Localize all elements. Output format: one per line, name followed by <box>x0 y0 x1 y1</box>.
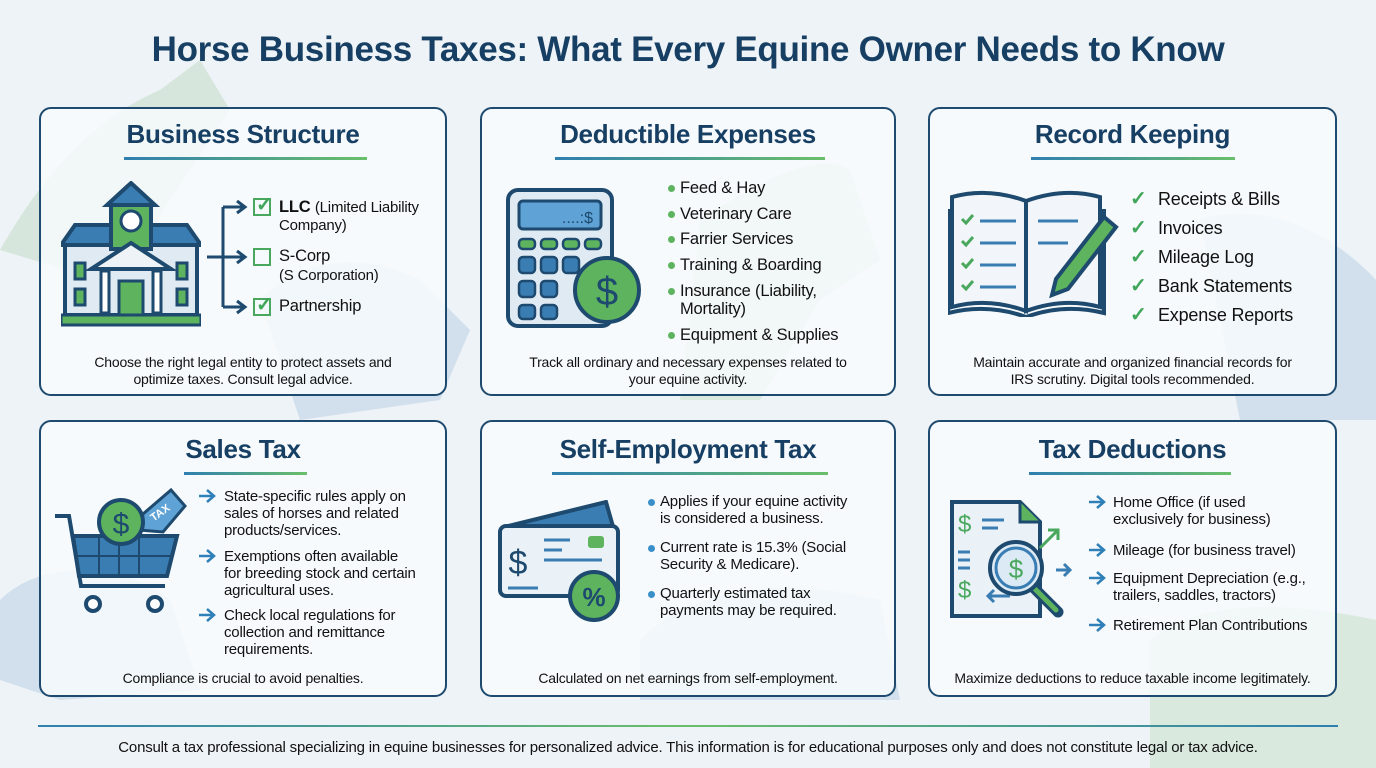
list: records <box>1130 188 1293 326</box>
list: sales tax rules: sales of horses and related <box>224 505 399 522</box>
footer disclaimer: Consult a tax professional specializing in equine businesses for personalized advice. This information is for educational purposes only and does not constitute legal or tax advice. <box>118 739 1258 756</box>
panel: self-employment tax <box>480 420 896 697</box>
caption <box>973 354 1292 387</box>
heading: Deductible Expenses <box>560 119 816 149</box>
caption <box>94 354 392 387</box>
icon: document with magnifier: $ <box>958 577 971 604</box>
list: self-employment facts: Current rate is 15.3% (Social <box>660 539 846 556</box>
heading: Record Keeping <box>1035 119 1230 149</box>
caption <box>529 354 847 387</box>
icon: document with magnifier: $ <box>958 511 971 538</box>
heading: Business Structure <box>126 119 360 149</box>
list: expenses: Equipment & Supplies <box>680 326 838 344</box>
icon: shopping cart with tax tag: TAX <box>148 502 173 524</box>
list: entities: (S Corporation) <box>279 267 379 284</box>
list: records: ✓ <box>1130 188 1147 210</box>
panel: record keeping <box>928 107 1337 396</box>
list: expenses: Mortality) <box>680 300 746 318</box>
list: entities: ✓ <box>256 194 273 216</box>
list: entities <box>253 194 419 316</box>
icon: document with magnifier <box>950 500 1072 618</box>
list: records: ✓ <box>1130 275 1147 297</box>
heading: Self-Employment Tax <box>560 434 816 464</box>
icon: check with percent: % <box>582 582 606 612</box>
list: sales tax rules <box>199 488 416 658</box>
icon: building <box>61 181 201 326</box>
caption: Calculated on net earnings from self-employment. <box>538 670 838 686</box>
list: expenses <box>668 179 838 344</box>
list: sales tax rules: collection and remittance <box>224 624 385 641</box>
panel: business structure <box>39 107 447 396</box>
list: deductions <box>1089 494 1307 634</box>
caption: your equine activity. <box>629 371 747 387</box>
icon: calculator <box>506 188 641 328</box>
list: sales tax rules: products/services. <box>224 522 341 539</box>
list: sales tax rules: agricultural uses. <box>224 582 334 599</box>
heading: Sales Tax <box>185 434 301 464</box>
caption: Maintain accurate and organized financial records for <box>973 354 1292 370</box>
list: sales tax rules: Check local regulations for <box>224 607 395 624</box>
caption: Compliance is crucial to avoid penalties. <box>123 670 363 686</box>
list: deductions: Equipment Depreciation (e.g., <box>1113 570 1306 587</box>
list: self-employment facts: Applies if your equine activity <box>660 493 847 510</box>
list: entities: LLC (Limited Liability <box>279 198 419 216</box>
icon: calculator: ....:$ <box>562 210 593 227</box>
list: sales tax rules: State-specific rules apply on <box>224 488 406 505</box>
icon: document with magnifier: $ <box>1009 554 1024 584</box>
title: Horse Business Taxes: What Every Equine Owner Needs to Know <box>152 30 1224 69</box>
list: sales tax rules: Exemptions often available <box>224 548 398 565</box>
list: expenses: Farrier Services <box>680 230 793 248</box>
panel: sales tax <box>39 420 447 697</box>
caption: Track all ordinary and necessary expenses related to <box>529 354 847 370</box>
list: self-employment facts: Quarterly estimated tax <box>660 585 810 602</box>
icon: shopping cart with tax tag <box>55 488 187 613</box>
heading: Tax Deductions <box>1039 434 1226 464</box>
list: sales tax rules: requirements. <box>224 641 313 658</box>
list: entities: S-Corp <box>279 247 330 265</box>
list: entities: ✓ <box>256 294 273 316</box>
list: entities: Company) <box>279 217 347 234</box>
list: self-employment facts <box>648 493 848 619</box>
list: deductions: Home Office (if used <box>1113 494 1245 511</box>
panel: tax deductions <box>928 420 1337 697</box>
list: expenses: Feed & Hay <box>680 179 765 197</box>
arrows: bracket <box>207 200 248 314</box>
list: deductions: Mileage (for business travel) <box>1113 542 1296 559</box>
icon: shopping cart with tax tag: $ <box>113 508 130 541</box>
caption: IRS scrutiny. Digital tools recommended. <box>1011 371 1254 387</box>
caption: optimize taxes. Consult legal advice. <box>133 371 353 387</box>
list: records: Invoices <box>1158 218 1222 238</box>
list: entities: Partnership <box>279 297 361 315</box>
list: records: ✓ <box>1130 304 1147 326</box>
icon: calculator: $ <box>596 270 618 314</box>
list: records: Expense Reports <box>1158 305 1293 325</box>
list: records: ✓ <box>1130 217 1147 239</box>
list: sales tax rules: for breeding stock and certain <box>224 565 416 582</box>
list: self-employment facts: payments may be required. <box>660 602 837 619</box>
list: deductions: Retirement Plan Contributions <box>1113 617 1307 634</box>
list: records: ✓ <box>1130 246 1147 268</box>
list: deductions: trailers, saddles, tractors) <box>1113 587 1276 604</box>
list: records: Mileage Log <box>1158 247 1254 267</box>
icon: check with percent <box>498 500 620 622</box>
list: records: Receipts & Bills <box>1158 189 1280 209</box>
list: expenses: Insurance (Liability, <box>680 282 817 300</box>
list: records: Bank Statements <box>1158 276 1292 296</box>
icon: check with percent: $ <box>509 544 528 582</box>
icon: ledger book with pencil <box>948 190 1119 317</box>
list: deductions: exclusively for business) <box>1113 511 1271 528</box>
caption: Maximize deductions to reduce taxable income legitimately. <box>954 670 1311 686</box>
caption: Choose the right legal entity to protect assets and <box>94 354 392 370</box>
list: expenses: Veterinary Care <box>680 205 792 223</box>
list: self-employment facts: is considered a business. <box>660 510 823 527</box>
panel: deductible expenses <box>480 107 896 396</box>
list: self-employment facts: Security & Medicare). <box>660 556 799 573</box>
list: expenses: Training & Boarding <box>680 256 821 274</box>
